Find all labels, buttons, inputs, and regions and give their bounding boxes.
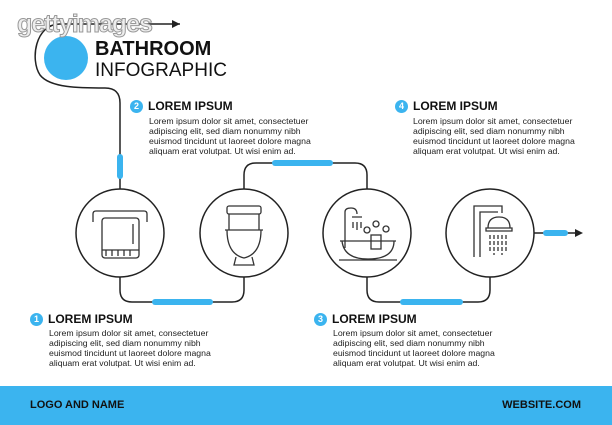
text 1 — [49, 328, 211, 368]
heading 3: 3 — [318, 314, 323, 324]
text 3 — [333, 328, 495, 368]
footer — [0, 386, 612, 425]
text 1: euismod tincidunt ut laoreet dolore magna — [49, 348, 211, 358]
website: WEBSITE.COM — [502, 399, 581, 411]
text 2: aliquam erat volutpat. Ut wisi enim ad. — [149, 146, 296, 156]
text 4: aliquam erat volutpat. Ut wisi enim ad. — [413, 146, 560, 156]
title — [95, 38, 227, 81]
text 1: Lorem ipsum dolor sit amet, consectetuer — [49, 328, 208, 338]
heading 2: LOREM IPSUM — [148, 99, 233, 113]
text 4: adipiscing elit, sed diam nonummy nibh — [413, 126, 565, 136]
title circle — [44, 36, 88, 80]
icon: shower — [474, 206, 512, 257]
heading 2: 2 — [134, 101, 139, 111]
title: BATHROOM — [95, 38, 211, 60]
text 2: euismod tincidunt ut laoreet dolore magna — [149, 136, 311, 146]
icon: bathtub — [339, 208, 397, 260]
text 3: euismod tincidunt ut laoreet dolore magna — [333, 348, 495, 358]
heading 3: LOREM IPSUM — [332, 312, 417, 326]
heading 4: 4 — [399, 101, 404, 111]
text 3: adipiscing elit, sed diam nonummy nibh — [333, 338, 485, 348]
logo text: LOGO AND NAME — [30, 399, 124, 411]
heading 4: LOREM IPSUM — [413, 99, 498, 113]
icon: toilet — [225, 206, 263, 265]
text 3: Lorem ipsum dolor sit amet, consectetuer — [333, 328, 492, 338]
text 1: adipiscing elit, sed diam nonummy nibh — [49, 338, 201, 348]
text 4: euismod tincidunt ut laoreet dolore magna — [413, 136, 575, 146]
text 2: adipiscing elit, sed diam nonummy nibh — [149, 126, 301, 136]
watermark: gettyimages — [17, 10, 152, 38]
text 2: Lorem ipsum dolor sit amet, consectetuer — [149, 116, 308, 126]
text 2 — [149, 116, 311, 156]
title: INFOGRAPHIC — [95, 60, 227, 81]
heading 1: 1 — [34, 314, 39, 324]
text 4 — [413, 116, 575, 156]
text 1: aliquam erat volutpat. Ut wisi enim ad. — [49, 358, 196, 368]
heading 1: LOREM IPSUM — [48, 312, 133, 326]
icon: towel — [93, 211, 147, 258]
text 4: Lorem ipsum dolor sit amet, consectetuer — [413, 116, 572, 126]
text 3: aliquam erat volutpat. Ut wisi enim ad. — [333, 358, 480, 368]
